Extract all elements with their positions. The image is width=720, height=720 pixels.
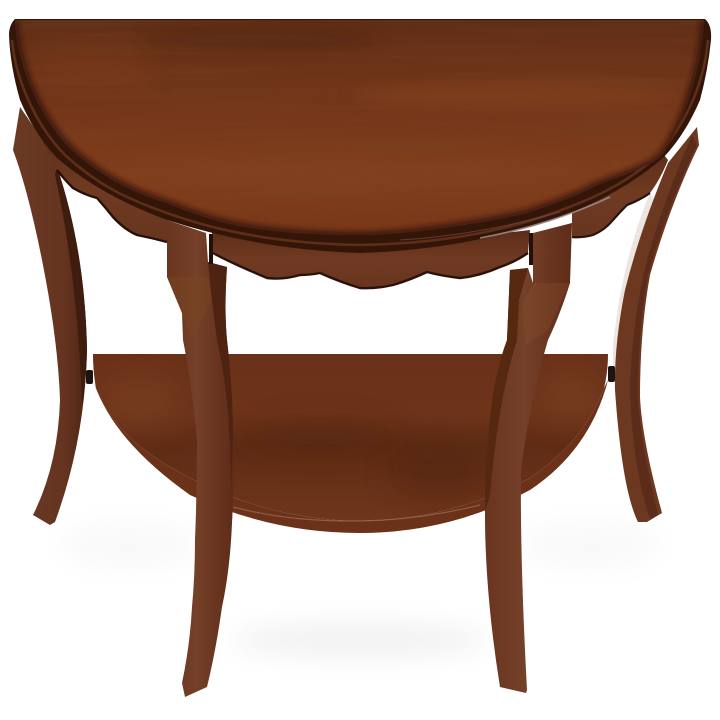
back left leg <box>13 107 87 525</box>
front left leg <box>167 220 233 697</box>
apron with scalloped edge <box>38 133 668 288</box>
right apron <box>572 150 668 237</box>
moulded edge <box>9 19 711 253</box>
wood grain and tone <box>15 20 704 235</box>
front right leg <box>485 223 572 693</box>
floor shadows <box>60 523 660 656</box>
shelf bracket bolts <box>86 370 93 384</box>
shelf rim <box>93 380 608 533</box>
back right leg <box>613 127 699 522</box>
centre apron <box>212 230 530 288</box>
shelf surface <box>93 354 608 521</box>
lower shelf <box>86 354 615 533</box>
table top <box>9 19 712 253</box>
left apron <box>38 133 167 242</box>
top surface <box>15 20 704 235</box>
